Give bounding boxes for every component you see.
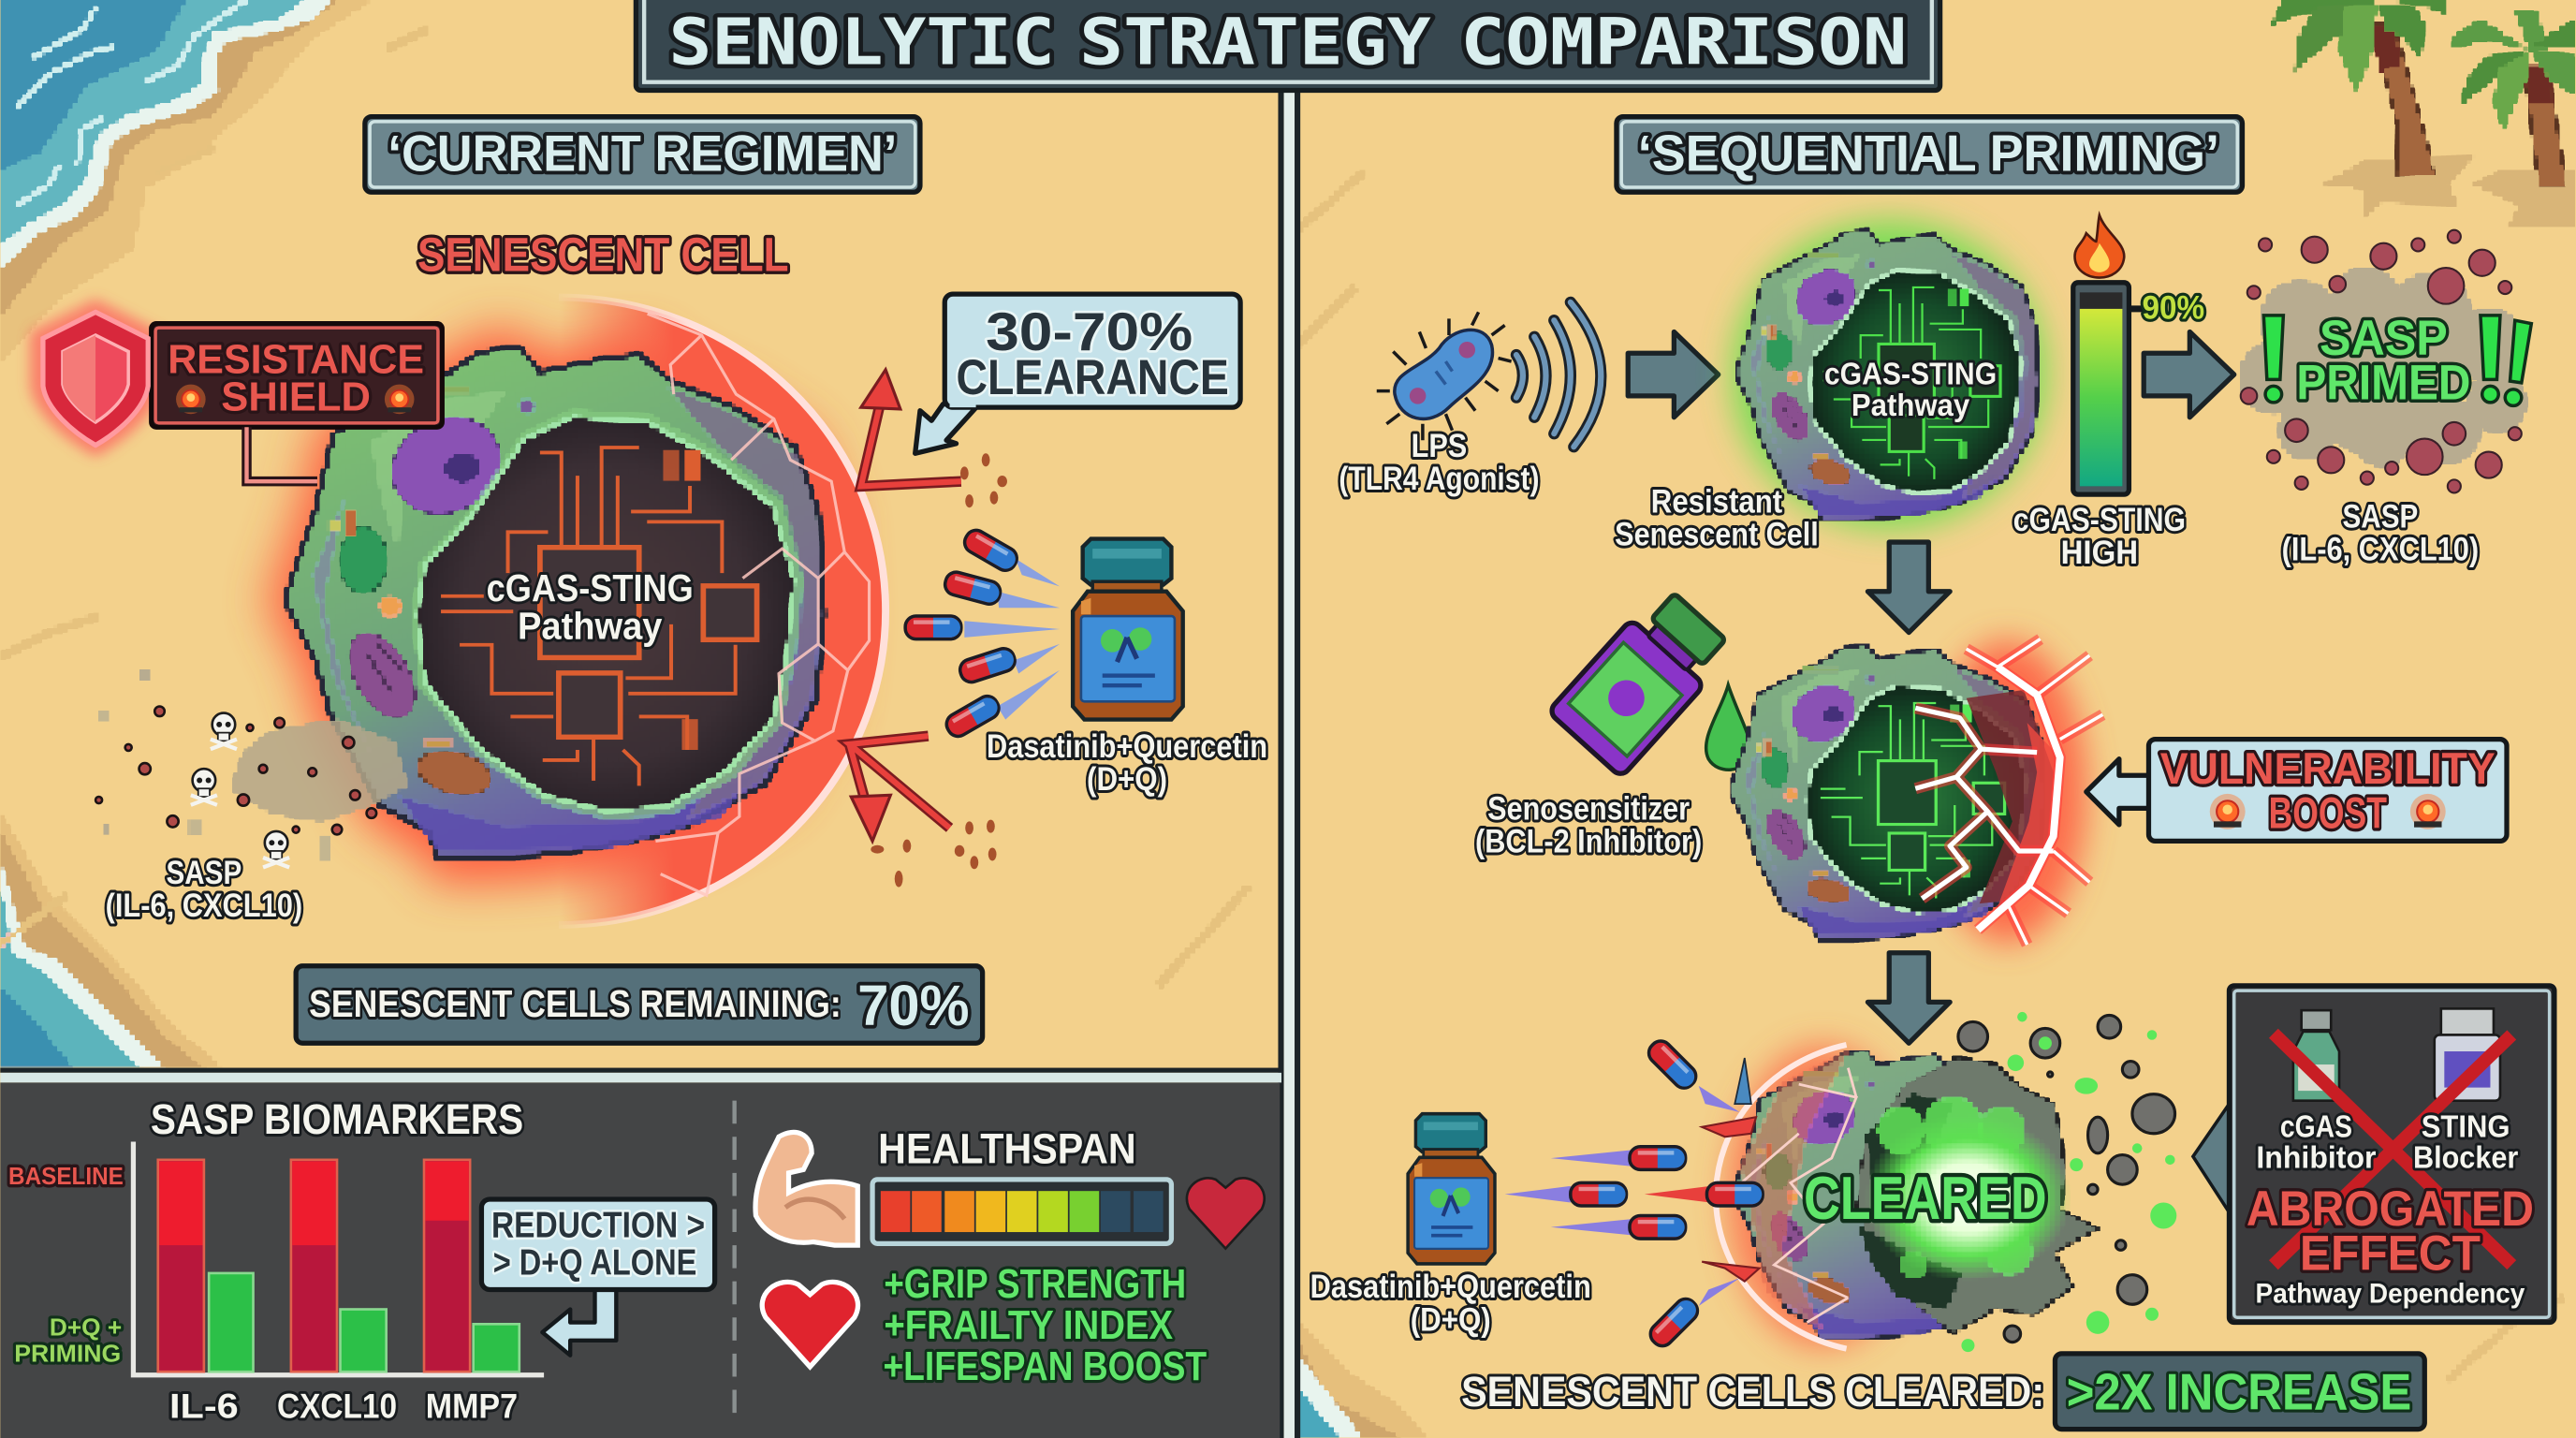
callout: 30-70% clearance: CLEARANCE: [957, 350, 1229, 405]
callout: 30-70% clearance: [915, 294, 1240, 453]
label: cGAS-STING pathway (primed): Pathway: [1852, 389, 1970, 423]
icon: signal waves: [1516, 302, 1601, 447]
dashed divider: [733, 1101, 736, 1423]
label: cleared: CLEARED: [1804, 1164, 2047, 1232]
label: senosensitizer: Senosensitizer: [1487, 791, 1690, 828]
deflected arrow: upper: [861, 370, 1007, 507]
icon: senosensitizer bottle: [1548, 583, 1751, 778]
label: cGAS-STING high: [2013, 502, 2186, 571]
pills: D+Q volley on primed cell: [1505, 1036, 1763, 1350]
arrow: LPS to cell: [1628, 331, 1719, 418]
callout: reduction beyond D+Q alone: > D+Q ALONE: [493, 1243, 696, 1284]
label: LPS: (TLR4 Agonist): [1339, 461, 1539, 497]
labels: inhibitors: STING: [2422, 1109, 2510, 1144]
arrow: primed cell to senosensitizer step: [1867, 542, 1950, 633]
right panel: sequential priming: [1310, 117, 2554, 1430]
bottle: D+Q: [1073, 539, 1183, 720]
label: abrogated effect: EFFECT: [2300, 1225, 2481, 1281]
label: LPS: [1339, 428, 1539, 497]
callout: 30-70% clearance: 30-70%: [986, 302, 1193, 362]
resistance shield badge: RESISTANCE: [168, 336, 424, 382]
beach: bottom-left sea of left panel: [0, 814, 222, 1068]
cleared cell exploding: [1716, 1012, 2176, 1352]
palm trees: [2272, 0, 2576, 225]
callout: reduction beyond D+Q alone: [481, 1199, 715, 1356]
heading: current regimen: ‘CURRENT REGIMEN’: [388, 125, 897, 182]
arrow: meter to SASP: [2144, 331, 2234, 418]
label: resistant senescent cell: Senescent Cell: [1615, 517, 1819, 553]
bar chart: SASP biomarkers: MMP7: [426, 1387, 518, 1425]
bar chart: SASP biomarkers: IL-6: [169, 1387, 239, 1425]
label: cGAS-STING pathway (primed): [1824, 358, 1997, 423]
callout: reduction beyond D+Q alone: REDUCTION >: [491, 1205, 705, 1245]
pills: dasatinib + quercetin volley: [905, 526, 1060, 741]
label: D+Q second dose: Dasatinib+Quercetin: [1310, 1269, 1591, 1305]
healthspan gauge: [872, 1180, 1171, 1243]
bar chart: SASP biomarkers: D+Q +: [50, 1313, 122, 1342]
arrow: sensitized cell to clearance: [1867, 953, 1950, 1043]
label: abrogated effect: ABROGATED: [2247, 1181, 2534, 1237]
cGAS-STING activity meter: 90%: [2142, 289, 2204, 326]
senescent cell with resistance shield: [270, 298, 886, 925]
label: cGAS-STING high: HIGH: [2061, 535, 2138, 571]
label: resistant senescent cell: Resistant: [1651, 483, 1782, 520]
label: cGAS-STING pathway: [487, 566, 694, 648]
labels: inhibitors: Blocker: [2413, 1141, 2518, 1176]
label: SASP output: SASP: [2343, 498, 2418, 535]
title banner: STRATEGY: [1079, 5, 1431, 80]
SASP cloud with skulls: [95, 670, 407, 867]
label: D+Q: Dasatinib+Quercetin: [987, 728, 1267, 765]
icon: STING blocker vial: [2435, 1008, 2500, 1101]
resistance shield badge: SHIELD: [221, 374, 371, 420]
bottle: D+Q second dose: [1408, 1114, 1495, 1264]
label: cGAS-STING pathway (primed): cGAS-STING: [1824, 358, 1997, 392]
title banner: [636, 0, 1940, 91]
icon: flexed arm: [755, 1132, 857, 1245]
labels: inhibitors: cGAS: [2280, 1109, 2352, 1144]
label: senescent cell: SENESCENT CELL: [417, 228, 789, 282]
sensitized cell with lightning cracks: [1732, 639, 2102, 945]
stat bar: cells remaining: 70%: [857, 974, 970, 1038]
beach: top-left sea: [0, 0, 372, 361]
label: SASP output: (IL-6, CXCL10): [2282, 531, 2479, 567]
label: D+Q: [987, 728, 1267, 798]
label: SASP output: [2282, 498, 2479, 567]
icon: dim heart: [1187, 1178, 1265, 1249]
label: D+Q: (D+Q): [1087, 761, 1167, 798]
red cross-out: [2274, 1034, 2511, 1265]
label: senosensitizer: (BCL-2 Inhibitor): [1475, 824, 1702, 860]
beach: bottom-left sea of right panel: [1299, 1323, 1426, 1437]
label: resistant senescent cell: [1615, 483, 1819, 553]
labels: inhibitors: Inhibitor: [2256, 1141, 2377, 1176]
label: abrogated effect: [2247, 1181, 2534, 1281]
healthspan benefits list: +FRAILTY INDEX: [884, 1302, 1173, 1348]
primed cell: [1732, 220, 2047, 529]
icon: flame: [2075, 215, 2124, 278]
deflected arrow: lower: [849, 736, 997, 888]
bar chart: SASP biomarkers: BASELINE: [8, 1162, 124, 1190]
callout: vulnerability boost: [2086, 740, 2507, 841]
label: senosensitizer: [1475, 791, 1702, 860]
healthspan benefits list: +GRIP STRENGTH: [884, 1261, 1186, 1307]
left panel: current regimen: [30, 117, 1267, 1043]
label: LPS: LPS: [1412, 428, 1467, 464]
bar chart: SASP biomarkers: [8, 1142, 544, 1425]
label: D+Q second dose: [1310, 1269, 1591, 1338]
label: pathway dependency: Pathway Dependency: [2256, 1278, 2525, 1309]
stat: cells cleared: SENESCENT CELLS CLEARED:: [1461, 1368, 2044, 1416]
callout: vulnerability boost: BOOST: [2269, 788, 2387, 838]
icon: LPS bacterium: [1377, 312, 1512, 440]
icon: bright heart: [762, 1282, 858, 1367]
SASP primed cloud: SASP: [2320, 311, 2448, 366]
heading: SASP biomarkers: SASP BIOMARKERS: [151, 1095, 523, 1143]
cGAS-STING activity meter: [2073, 283, 2204, 494]
title banner: SENOLYTIC: [668, 5, 1055, 80]
label: cGAS-STING pathway: cGAS-STING: [487, 566, 694, 609]
stat: cells cleared: [1461, 1354, 2424, 1430]
SASP primed cloud: [2239, 230, 2531, 492]
callout: vulnerability boost: VULNERABILITY: [2160, 744, 2496, 794]
bar chart: SASP biomarkers: CXCL10: [277, 1387, 397, 1425]
SASP primed cloud: PRIMED: [2296, 355, 2470, 410]
label: D+Q second dose: (D+Q): [1411, 1301, 1491, 1338]
label: cGAS-STING high: cGAS-STING: [2013, 502, 2186, 538]
label: SASP: [106, 855, 302, 924]
healthspan benefits list: [883, 1261, 1207, 1389]
label: SASP: SASP: [167, 855, 242, 891]
heading: sequential priming: ‘SEQUENTIAL PRIMING’: [1638, 125, 2219, 182]
bar chart: SASP biomarkers: PRIMING: [14, 1340, 121, 1368]
healthspan benefits list: +LIFESPAN BOOST: [883, 1343, 1207, 1389]
label: SASP: (IL-6, CXCL10): [106, 888, 302, 924]
resistance shield badge: [30, 299, 442, 481]
labels: inhibitors: [2256, 1109, 2518, 1176]
stat bar: cells remaining: SENESCENT CELLS REMAINING:: [309, 982, 842, 1025]
icon: cGAS inhibitor vial: [2293, 1010, 2339, 1101]
stat: cells cleared: >2X INCREASE: [2067, 1364, 2411, 1421]
panel dividers: [0, 91, 1300, 1438]
panel: dark outcomes: [0, 1082, 1280, 1438]
label: healthspan: HEALTHSPAN: [878, 1124, 1136, 1172]
stat bar: cells remaining: [296, 966, 983, 1043]
label: cGAS-STING pathway: Pathway: [518, 605, 663, 648]
title banner: COMPARISON: [1460, 5, 1908, 80]
panel: abrogated effect: [2193, 986, 2554, 1323]
